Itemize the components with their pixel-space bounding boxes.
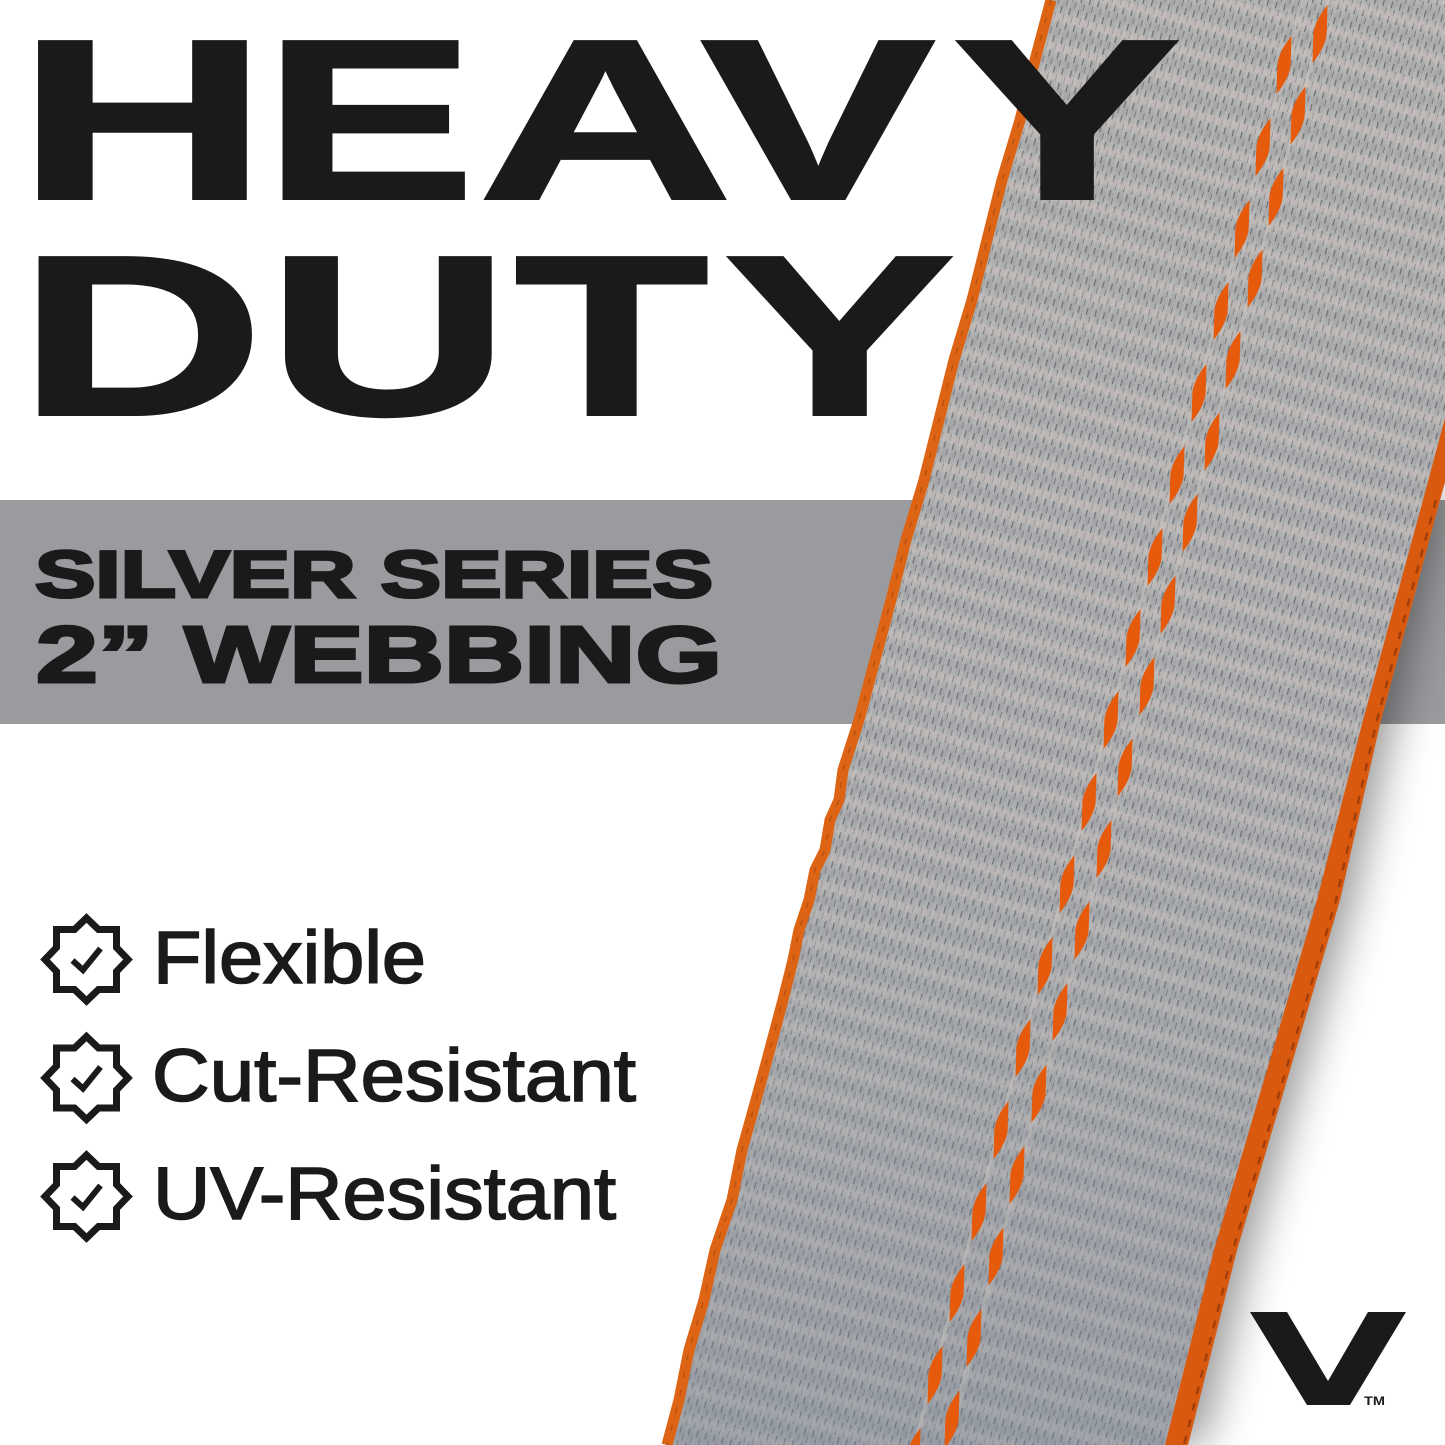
- icon: check badge: [45, 1036, 128, 1120]
- label: cut-resistant: Cut-Resistant: [152, 1034, 636, 1117]
- orange right edge: [1165, 418, 1445, 1445]
- title: HEAVY: E: [263, 0, 475, 248]
- title: HEAVY: [17, 0, 1181, 248]
- title: DUTY: Y: [724, 210, 955, 464]
- title: HEAVY: H: [17, 0, 268, 248]
- webbing strap: [662, 0, 1445, 1445]
- woven strap body: [666, 0, 1445, 1445]
- trademark: TM: [1364, 1396, 1385, 1408]
- title: DUTY: U: [267, 210, 510, 464]
- title: DUTY: T: [514, 210, 709, 464]
- title: HEAVY: A: [478, 0, 733, 248]
- banner heading: silver series: SILVER SERIES: [35, 537, 713, 611]
- title: DUTY: [18, 210, 955, 464]
- feature: cut-resistant: [45, 1034, 636, 1120]
- pale stitch channels: [915, 0, 1329, 1445]
- icon: check badge: [45, 1155, 128, 1238]
- logo: V mark: [1250, 1312, 1406, 1408]
- feature: uv-resistant: [45, 1152, 616, 1238]
- title: DUTY: D: [18, 210, 264, 464]
- grey banner: [0, 500, 1445, 724]
- icon: check badge: [45, 918, 128, 1001]
- label: uv-resistant: UV-Resistant: [153, 1152, 616, 1235]
- banner heading: webbing size: 2” WEBBING: [36, 610, 722, 699]
- strap drop shadow: [1000, 480, 1445, 1445]
- label: flexible: Flexible: [153, 916, 426, 999]
- title: HEAVY: Y: [953, 0, 1181, 248]
- feature: flexible: [45, 916, 426, 1001]
- orange left edge: [667, 0, 1051, 1445]
- title: HEAVY: V: [701, 0, 935, 248]
- orange stitching: [906, 5, 1328, 1445]
